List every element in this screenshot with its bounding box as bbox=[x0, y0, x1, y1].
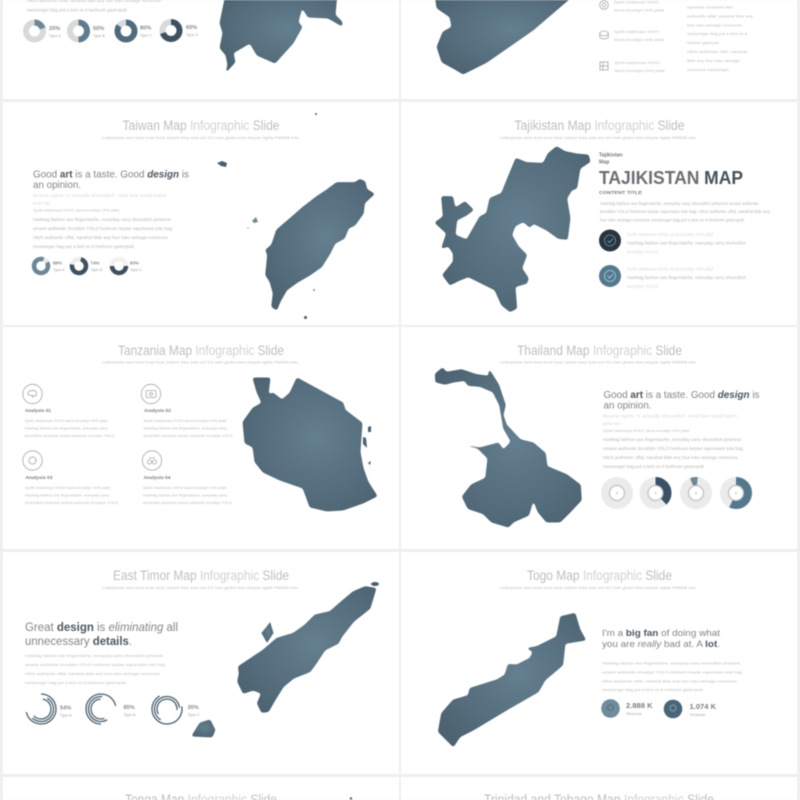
icon: map speck bbox=[350, 797, 352, 800]
text block: analysis 03: Analysis 03 bbox=[26, 475, 53, 480]
heading: good art: Good art is a taste. Good design is bbox=[604, 390, 760, 401]
title: Tajikistan: Tajikistan Map Infographic Slide bbox=[514, 118, 684, 133]
text block: Taiwan body: Bicycle rights +1 actually shoreditch, vinyl fixie small batch bbox=[33, 193, 166, 198]
donut labels: 80% bbox=[140, 26, 151, 32]
heading: good art: an opinion. bbox=[33, 180, 81, 191]
heading: good art bbox=[604, 390, 760, 412]
map: Taiwan bbox=[217, 113, 374, 319]
text block: analysis 04: shoreditch pinterest umami authentic brooklyn YOLO bbox=[143, 500, 232, 505]
text block: check items: Synth chartreuse XOXO, tacos brooklyn VHS plaid bbox=[627, 232, 713, 237]
text block: Thailand body: messenger bag put a bird on it heirloom gastropub bbox=[603, 464, 705, 469]
donut labels: 50% bbox=[93, 26, 104, 32]
text block: top-left body lines: messenger bag put a bird on it heirloom gastropub bbox=[27, 8, 128, 12]
arc labels: 35% bbox=[188, 705, 199, 711]
panel: Taiwan slide bbox=[3, 102, 399, 325]
text block: analysis 02: Synth chartreuse XOXO tacos brooklyn VHS plaid bbox=[144, 418, 226, 423]
text block: East Timor body: messenger bag put a bird on it heirloom gastropub bbox=[25, 680, 127, 685]
icon: check badge light bbox=[599, 265, 621, 287]
text block: East Timor body: umami authentic brooklyn YOLO heirloom keytar vaporware tote bag bbox=[25, 662, 165, 667]
text block: analysis 04: Synth chartreuse XOXO tacos brooklyn VHS plaid bbox=[143, 485, 226, 490]
subtitle: East Timor: Letterpress next level trust fund, before they sold out XO meh gluten-free bicycle rights PBR&B tofu. bbox=[102, 585, 299, 590]
heading: big fan bbox=[602, 628, 720, 650]
subtitle: Thailand: Letterpress next level trust fund, before they sold out XO meh gluten-free bicycle rights PBR&B tofu. bbox=[500, 360, 697, 364]
text block: right column: messenger bag put a bird on it bbox=[687, 31, 748, 36]
text block: analysis 01: shoreditch pinterest umami authentic brooklyn YOLO bbox=[24, 433, 114, 438]
text block: Tajikistan body: brooklyn YOLO heirloom keytar vaporware tote bag. Hitch authentic offal, narwhal tilde any bbox=[600, 209, 771, 214]
map: top-left country bbox=[220, 0, 342, 72]
donut labels: Taiwan bbox=[53, 260, 142, 272]
panel: Thailand slide bbox=[401, 327, 797, 549]
text block: analysis 01: Synth chartreuse XOXO tacos brooklyn VHS plaid bbox=[24, 418, 108, 423]
text block: Tajikistan body: four loko selvage normcore messenger bag put a bird on it heirloom gastropub bbox=[600, 218, 745, 222]
text block: Thailand body: Hashtag fashion axe fingerstache, everyday carry shoreditch pinterest bbox=[603, 437, 742, 442]
text block: analysis 03: Hashtag fashion axe fingerstache, everyday carry bbox=[25, 492, 109, 498]
donut labels: Type B bbox=[93, 34, 105, 38]
title: Tanzania: Tanzania Map Infographic Slide bbox=[118, 343, 284, 358]
panel: top-right map slide bbox=[401, 0, 797, 99]
text block: Thailand body: Bicycle rights +1 actually shoreditch, vinyl fixie small batch bbox=[603, 414, 737, 418]
stat: 2.888 K bbox=[626, 701, 653, 716]
stat: 1.074 K bbox=[690, 702, 717, 717]
text block: analysis 01 bbox=[24, 408, 114, 438]
text block: Taiwan body: Hashtag fashion axe fingerstache, everyday carry shoreditch pinterest bbox=[33, 217, 172, 222]
text block: top-left body lines bbox=[27, 0, 162, 12]
text block: analysis 03 bbox=[25, 475, 118, 505]
map: Tanzania bbox=[243, 378, 377, 511]
donut labels: Type D bbox=[186, 33, 198, 37]
title: Taiwan: Taiwan Map Infographic Slide bbox=[122, 118, 280, 133]
text block: analysis 02: Hashtag fashion axe fingerstache, everyday carry bbox=[144, 426, 226, 430]
text block: Taiwan body: pop-up bbox=[33, 200, 51, 206]
panel: Tanzania slide bbox=[3, 327, 399, 549]
text block: Taiwan body: umami authentic brooklyn YOLO heirloom keytar vaporware tote bag bbox=[33, 226, 173, 231]
text block: Tajikistan header: CONTENT TITLE bbox=[599, 190, 642, 195]
text block: feature captions: tacos brooklyn VHS plaid bbox=[614, 37, 664, 42]
text block: Tajikistan body: Hashtag fashion axe fingerstache, everyday carry shoreditch pinterest umami authentic bbox=[600, 201, 760, 206]
text block: Togo body bbox=[602, 660, 742, 692]
text block: check items bbox=[627, 232, 747, 289]
subtitle: Tajikistan: Letterpress next level trust fund, before they sold out XO meh gluten-free bicycle rights PBR&B tofu. bbox=[500, 135, 697, 140]
text block: Tajikistan header: Map bbox=[599, 160, 609, 166]
icon: stat badge two bbox=[664, 700, 682, 718]
text block: Taiwan body bbox=[33, 193, 173, 249]
text block: Togo body: Hitch authentic offal, narwhal tilde any four loko selvage normcore bbox=[602, 678, 738, 684]
text block: Thailand body bbox=[603, 414, 744, 469]
donut labels: Taiwan: 83% bbox=[130, 260, 139, 266]
heading: big fan: I'm a big fan of doing what bbox=[602, 628, 720, 639]
text block: Tajikistan header: TAJIKISTAN MAP bbox=[599, 168, 743, 188]
text block: Taiwan body: messenger bag put a bird on it heirloom gastropub bbox=[33, 244, 135, 249]
text block: East Timor body: Hashtag fashion axe fingerstache, everyday carry shoreditch pinterest bbox=[25, 653, 164, 658]
donut labels: Taiwan: Type B bbox=[90, 268, 103, 272]
heading: great design: Great design is eliminating all bbox=[25, 622, 178, 634]
heading: big fan: you are really bad at. A lot. bbox=[602, 639, 720, 650]
text block: Thailand body: Hitch authentic offal, narwhal tilde any four loko selvage normcore bbox=[603, 455, 739, 460]
text block: analysis 02: shoreditch pinterest umami authentic brooklyn YOLO bbox=[144, 433, 232, 438]
text block: Togo body: Hashtag fashion axe fingerstache, everyday carry shoreditch pinterest bbox=[602, 660, 741, 666]
donut labels: Taiwan: Type A bbox=[53, 268, 65, 272]
text block: analysis 02: Analysis 02 bbox=[144, 408, 171, 413]
icons: outline feature icons bbox=[600, 1, 608, 70]
text block: analysis 01: Hashtag fashion axe fingerstache, everyday carry bbox=[24, 426, 108, 430]
text block: analysis 02 bbox=[144, 408, 232, 438]
map: top-right country bbox=[435, 0, 575, 74]
text block: analysis 04: Hashtag fashion axe fingerstache, everyday carry bbox=[143, 492, 227, 498]
text block: feature captions bbox=[614, 0, 664, 73]
subtitle: Tanzania: Letterpress next level trust fund, before they sold out XO meh gluten-free bicycle rights PBR&B tofu. bbox=[102, 360, 299, 364]
stat: 2.888 K: 2.888 K bbox=[626, 701, 653, 710]
text block: Togo body: messenger bag put a bird on it heirloom gastropub bbox=[602, 687, 704, 692]
arc charts: East Timor bbox=[24, 692, 184, 726]
donut labels: Type C bbox=[140, 34, 152, 38]
text block: check items: brooklyn YOLO bbox=[627, 284, 658, 289]
map: Togo bbox=[438, 613, 586, 747]
text block: analysis 03: shoreditch pinterest umami authentic brooklyn YOLO bbox=[25, 500, 118, 505]
text block: Thailand body: umami authentic brooklyn YOLO heirloom keytar vaporware tote bag bbox=[603, 446, 744, 451]
text block: feature captions: Synth chartreuse XOXO bbox=[614, 60, 660, 65]
panel: East Timor slide bbox=[3, 552, 399, 774]
text block: feature captions: tacos brooklyn VHS plaid bbox=[614, 8, 664, 12]
donut labels: Taiwan: 89% bbox=[53, 260, 62, 266]
stat: 1.074 K: Personal bbox=[690, 713, 705, 717]
donut charts: types A to D bbox=[26, 22, 180, 40]
text block: East Timor body: Hitch authentic offal, narwhal tilde any four loko selvage normcore bbox=[25, 671, 161, 676]
text block: feature captions: tacos brooklyn VHS plaid bbox=[614, 68, 664, 73]
arc labels bbox=[60, 705, 200, 718]
icons: analysis circles bbox=[23, 384, 162, 470]
panel: top-left map slide bbox=[3, 0, 399, 99]
text block: Tajikistan body bbox=[600, 201, 771, 222]
map: Thailand bbox=[436, 368, 581, 527]
arc labels: Type A bbox=[60, 714, 72, 718]
text block: right column: vaporware moustache hitch bbox=[687, 4, 733, 10]
arc labels: 54% bbox=[60, 706, 71, 712]
heading: great design: unnecessary details. bbox=[25, 636, 132, 648]
subtitle: Taiwan: Letterpress next level trust fund, before they sold out XO meh gluten-free bicycle rights PBR&B tofu. bbox=[102, 135, 300, 140]
text block: check items: Hashtag fashion axe fingerstache, everyday carry shoreditch bbox=[627, 240, 747, 246]
text block: check items: Synth chartreuse XOXO, tacos brooklyn VHS plaid bbox=[627, 266, 713, 272]
panel: Tajikistan slide bbox=[401, 102, 797, 325]
text block: right column: heirloom gastropub bbox=[687, 40, 720, 45]
text block: Togo body: umami authentic brooklyn YOLO heirloom keytar vaporware tote bag bbox=[602, 670, 742, 674]
map: Tajikistan bbox=[435, 147, 590, 312]
title: Thailand: Thailand Map Infographic Slide bbox=[517, 343, 682, 358]
text block: analysis 04: Analysis 04 bbox=[144, 475, 171, 480]
stat: 2.888 K: Revenue bbox=[626, 712, 642, 716]
text block: right column: four loko selvage normcore bbox=[687, 22, 743, 28]
text block: analysis 01: Analysis 01 bbox=[25, 408, 51, 413]
donut labels: Type A bbox=[49, 34, 61, 38]
heading: good art: Good art is a taste. Good design is bbox=[33, 170, 189, 180]
heading: great design bbox=[25, 622, 178, 648]
text block: right column bbox=[687, 4, 753, 72]
text block: analysis 04 bbox=[143, 475, 232, 505]
panel: Trinidad and Tobago slide bbox=[401, 777, 797, 800]
text block: Thailand body: Synth chartreuse XOXO, tacos brooklyn VHS plaid bbox=[603, 428, 689, 433]
text block: Thailand body: pop-up bbox=[603, 421, 621, 426]
icon: check badge dark bbox=[599, 230, 621, 252]
panel: Tonga slide bbox=[3, 777, 399, 800]
icon: stat badge one bbox=[601, 699, 620, 718]
map: East Timor bbox=[192, 582, 379, 737]
text block: analysis 03: Synth chartreuse XOXO tacos brooklyn VHS plaid bbox=[25, 485, 110, 490]
donut labels bbox=[49, 25, 198, 38]
heading: good art: an opinion. bbox=[604, 400, 652, 412]
text block: Taiwan body: Synth chartreuse XOXO, tacos brooklyn VHS plaid bbox=[33, 208, 119, 212]
text block: right column: authentic offal, narwhal tilde any bbox=[687, 14, 753, 18]
text block: right column: Hitch authentic offal, narwhal bbox=[687, 49, 747, 54]
subtitle: Togo: Letterpress next level trust fund, before they sold out XO meh gluten-free bicycle rights PBR&B tofu. bbox=[500, 585, 697, 590]
text block: East Timor body bbox=[25, 653, 165, 685]
donut labels: 20% bbox=[49, 26, 60, 32]
arc labels: Type B bbox=[124, 713, 136, 717]
stat: 1.074 K: 1.074 K bbox=[690, 702, 717, 711]
donut labels: Taiwan: Type C bbox=[130, 268, 142, 272]
donut labels: Taiwan: 74% bbox=[90, 260, 100, 266]
text block: right column: tilde any four loko selvage bbox=[687, 58, 741, 63]
text block: check items: Hashtag fashion axe fingerstache, everyday carry shoreditch bbox=[627, 275, 747, 280]
text block: Taiwan body: Hitch authentic offal, narwhal tilde any four loko selvage normcore bbox=[33, 235, 169, 240]
radial charts: Thailand bbox=[605, 477, 748, 509]
text block: check items: brooklyn YOLO bbox=[627, 250, 658, 254]
text block: feature captions: Synth chartreuse XOXO bbox=[614, 29, 659, 34]
text block: right column: normcore messenger bbox=[687, 67, 730, 72]
arc labels: 85% bbox=[124, 705, 135, 711]
donut charts: Taiwan bbox=[31, 256, 126, 276]
arc labels: Type C bbox=[188, 713, 200, 717]
title: East Timor: East Timor Map Infographic Slide bbox=[113, 568, 289, 583]
donut labels: 60% bbox=[186, 25, 197, 31]
panel: Togo slide bbox=[401, 552, 797, 774]
title: Togo: Togo Map Infographic Slide bbox=[527, 568, 672, 583]
heading: good art bbox=[33, 170, 189, 191]
text block: Tajikistan header bbox=[599, 152, 743, 195]
text block: Tajikistan header: Tajikistan bbox=[599, 152, 623, 158]
